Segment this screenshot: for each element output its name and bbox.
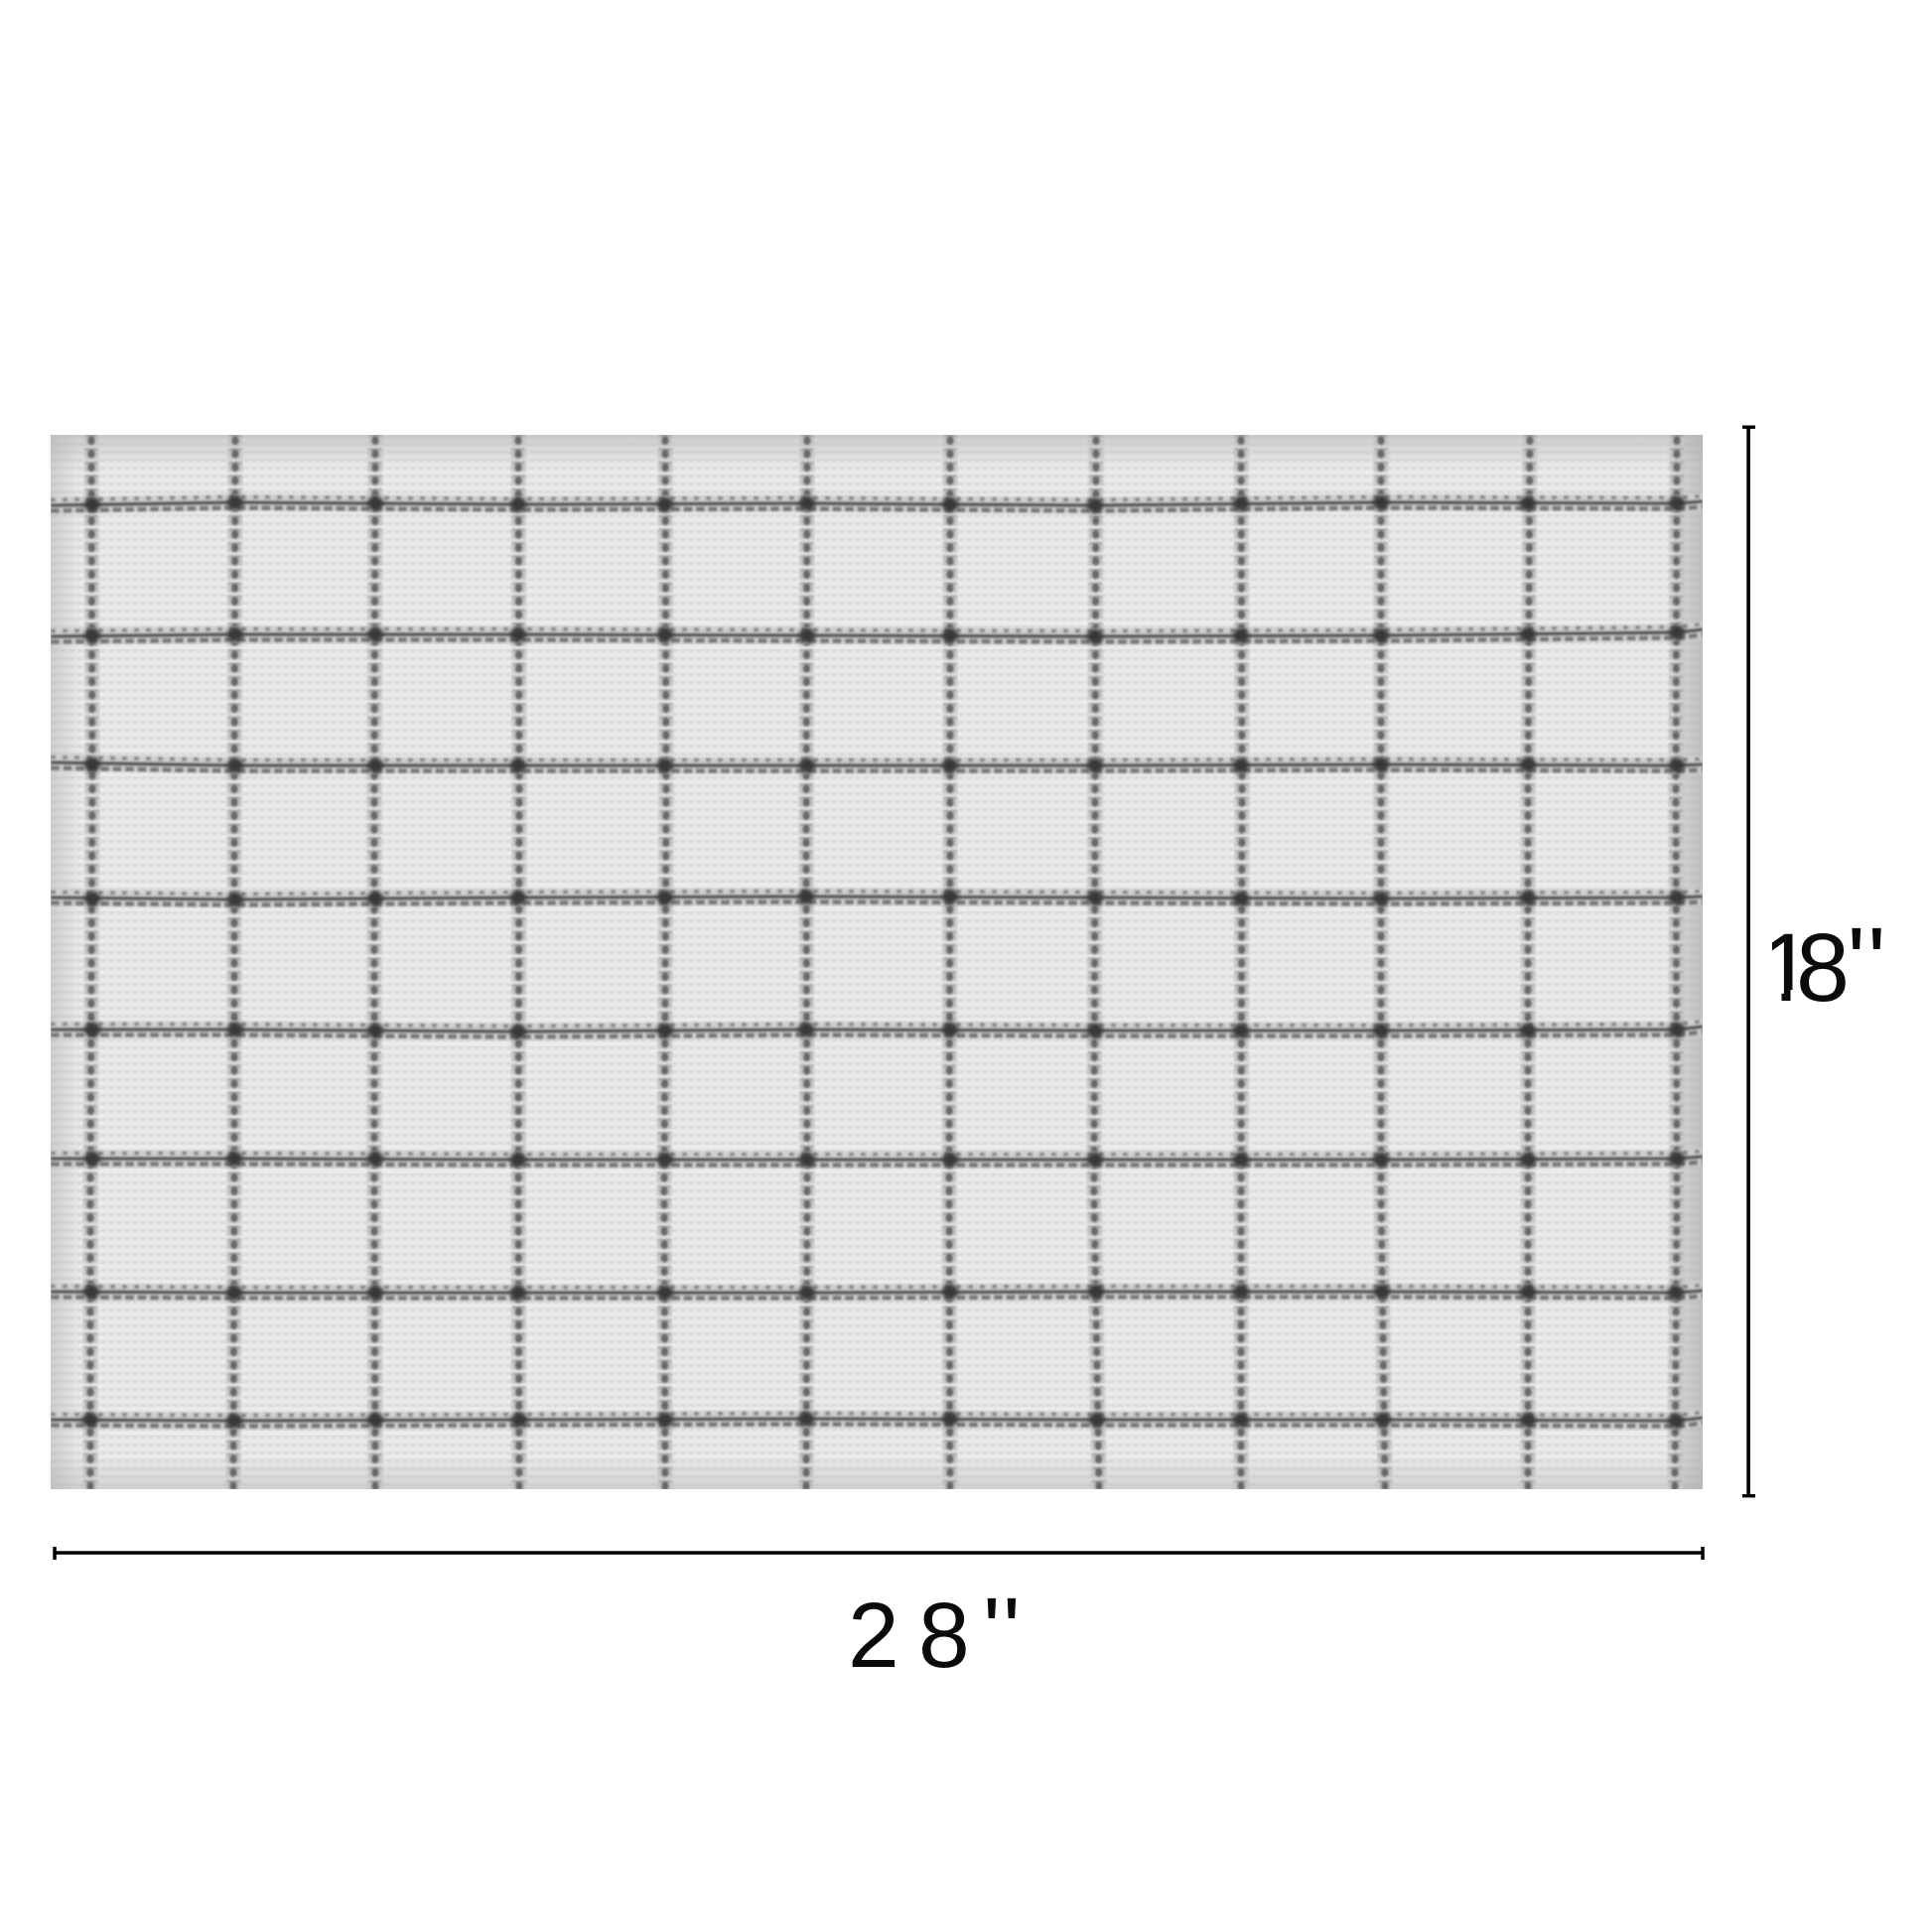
towel fabric base xyxy=(51,435,1703,1489)
horizontal check stripes xyxy=(51,496,1703,1426)
height dimension line xyxy=(1742,425,1755,1497)
width label: 28'' xyxy=(848,1579,1021,1687)
width dimension line xyxy=(53,1547,1705,1560)
infographic canvas xyxy=(51,425,1881,1668)
towel photo: checked waffle-weave kitchen towel xyxy=(51,435,1703,1489)
height label xyxy=(1772,927,1881,1002)
height label: 8'' xyxy=(1796,907,1886,1022)
stripe intersections xyxy=(90,502,1677,1421)
height label: 1 xyxy=(1759,913,1813,1022)
vertical check stripes xyxy=(90,435,1677,1489)
